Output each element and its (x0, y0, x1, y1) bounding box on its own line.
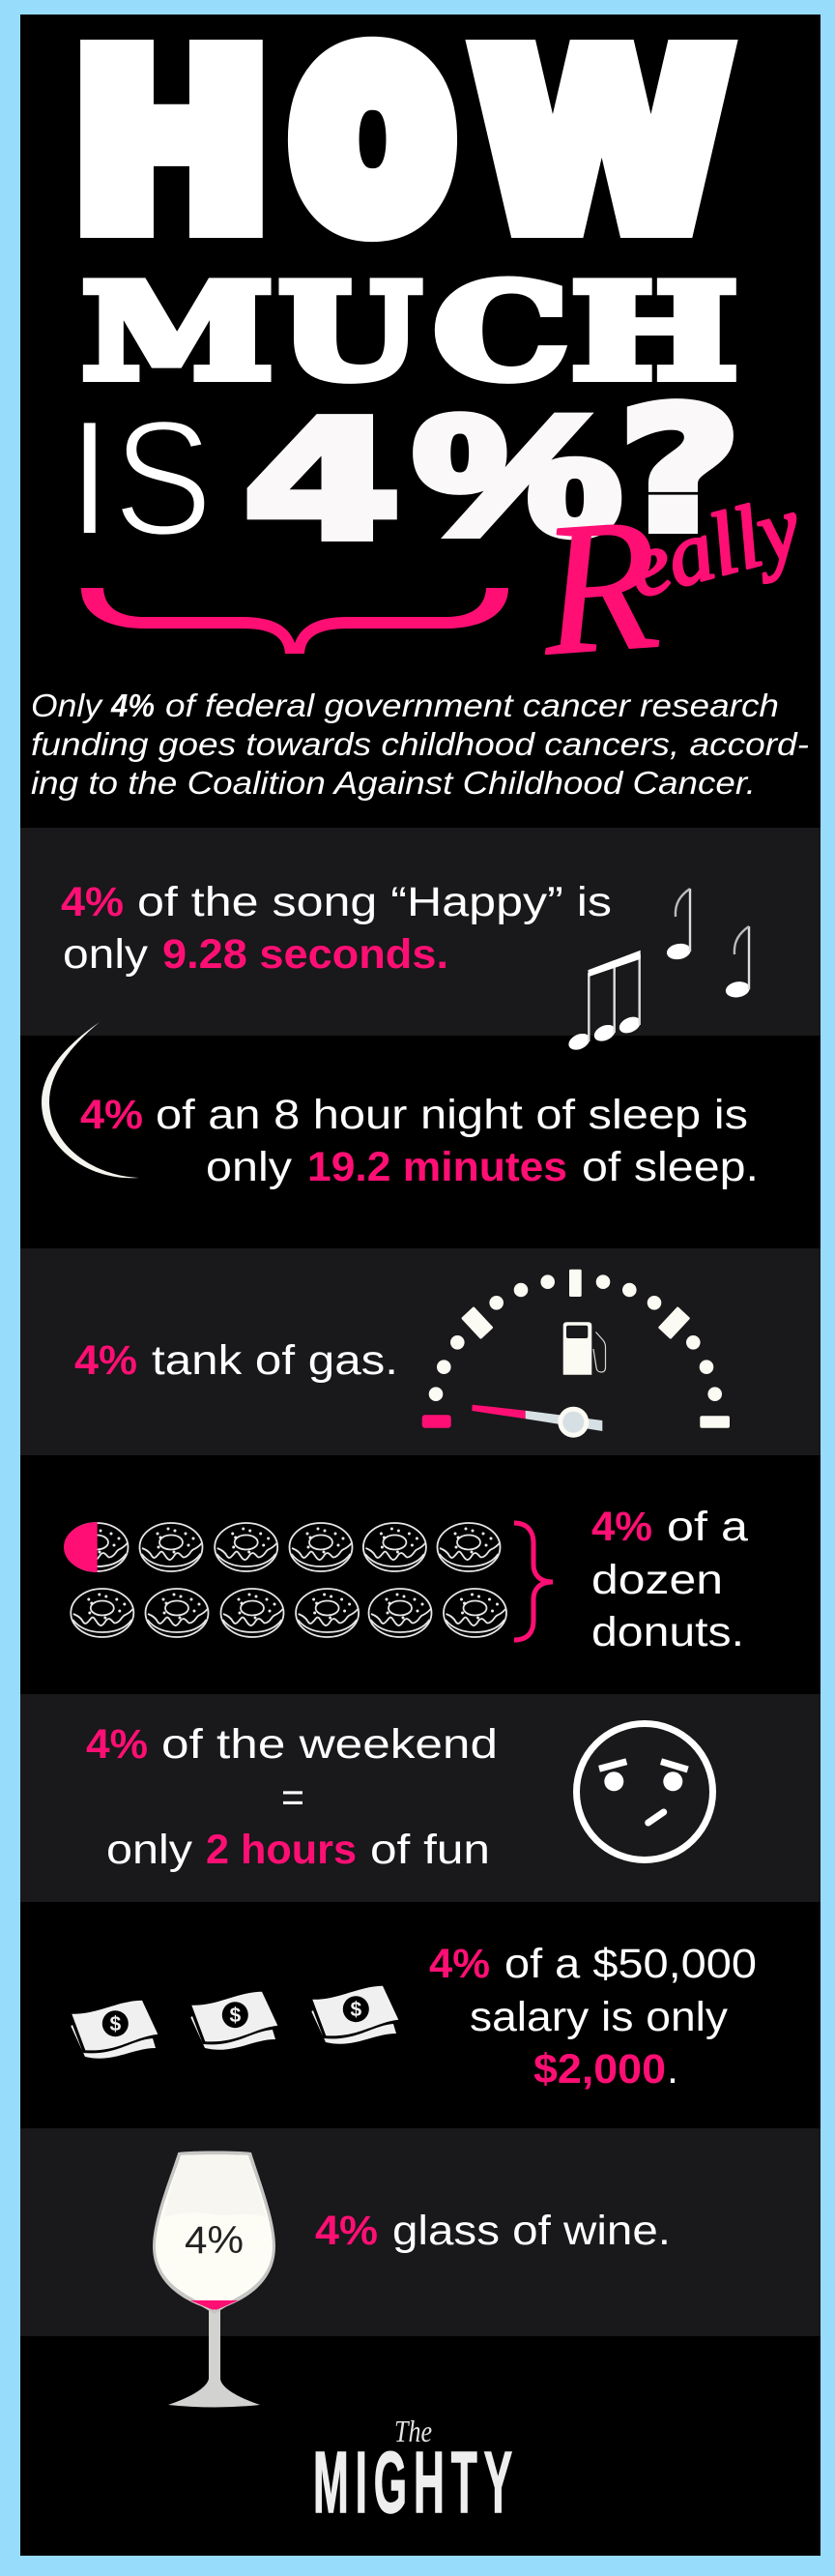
wine text: 4% (315, 2208, 378, 2254)
weekend text: 2 hours (206, 1827, 357, 1873)
donuts text: of a (667, 1504, 748, 1550)
sleep text: of an 8 hour night of sleep is (156, 1092, 748, 1138)
heading: 4%?: ? (619, 371, 741, 570)
note: single high (666, 889, 692, 961)
song text: only (63, 931, 149, 978)
donuts text (591, 1504, 748, 1655)
script word: Really (533, 476, 810, 695)
icon: worried face (576, 1723, 713, 1860)
script word: Really: eally (618, 476, 810, 616)
sleep text: 4% (80, 1092, 143, 1138)
fuel pump icon (563, 1322, 605, 1375)
gauge ticks (429, 1270, 730, 1428)
glass label: 4% (185, 2219, 244, 2262)
note: single right (725, 926, 751, 999)
song text: 4% (61, 879, 124, 925)
salary text: 4% (429, 1941, 490, 1987)
weekend text: only (106, 1827, 193, 1873)
song text (61, 879, 612, 978)
donuts row 1 (66, 1523, 501, 1571)
panel: salary (71, 1941, 757, 2093)
donuts text: donuts. (591, 1609, 744, 1655)
sleep text: of sleep. (582, 1144, 759, 1190)
song text: of the song “Happy” is (137, 879, 612, 925)
icon: crescent moon (42, 1022, 139, 1178)
empty marker (422, 1415, 451, 1428)
heading word: MUCH (82, 255, 737, 408)
heading word: IS: I (67, 386, 113, 571)
gas text: tank of gas. (152, 1337, 398, 1384)
wine text: glass of wine. (392, 2208, 671, 2254)
logo: The Mighty: The (394, 2414, 432, 2448)
intro text block: funding goes towards childhood cancers, accord- (31, 726, 809, 762)
heading: 4%? (242, 371, 741, 576)
intro text block: 4% (110, 688, 155, 723)
sleep text: only (206, 1144, 293, 1190)
heading word: MUCH: U (279, 256, 420, 408)
intro text block: Only (31, 688, 104, 723)
title (67, 8, 810, 695)
brace: donuts (514, 1523, 553, 1640)
heading word: HOW (73, 8, 727, 279)
panel: wine (20, 2128, 821, 2408)
salary text: of a $50,000 (504, 1941, 757, 1987)
brace under title (81, 588, 508, 654)
heading: 4%?: % (414, 381, 621, 570)
song text: 9.28 seconds. (162, 931, 448, 978)
panel: weekend (20, 1694, 821, 1902)
icons: money (71, 1986, 398, 2059)
salary text: . (667, 2046, 678, 2093)
eaten portion of donut (64, 1522, 98, 1572)
heading word: MUCH: M (82, 256, 273, 408)
intro text block (31, 688, 809, 801)
panel: sleep (42, 1022, 759, 1190)
panel: donuts (64, 1504, 748, 1655)
gauge (422, 1270, 730, 1438)
heading word: IS (67, 386, 213, 571)
donuts text: dozen (591, 1557, 723, 1603)
salary text (429, 1941, 757, 2093)
intro text block: ing to the Coalition Against Childhood Cancer. (31, 765, 756, 801)
gas text (74, 1337, 398, 1384)
heading word: HOW: W (476, 9, 727, 279)
sleep text: 19.2 minutes (307, 1144, 567, 1190)
panel: song (20, 828, 821, 1036)
heading word: HOW: O (298, 18, 447, 267)
needle (472, 1405, 602, 1438)
weekend text (86, 1721, 498, 1873)
icon: music notes (566, 889, 751, 1053)
script word: Really: R (533, 479, 665, 695)
heading word: HOW: H (73, 8, 270, 278)
heading word: IS: S (113, 387, 213, 571)
donuts text: 4% (591, 1504, 652, 1550)
logo: The Mighty (313, 2414, 519, 2532)
sleep text (80, 1092, 759, 1190)
weekend text: of the weekend (161, 1721, 498, 1768)
text: MIGHTY (313, 2435, 519, 2532)
intro text block: of federal government cancer research (165, 688, 779, 723)
heading word: MUCH: H (571, 255, 737, 408)
icon: wine glass (153, 2151, 275, 2408)
weekend text: = (281, 1774, 304, 1821)
salary text: salary is only (470, 1994, 729, 2040)
panel: gas (20, 1248, 821, 1455)
note: triple beamed (566, 951, 643, 1053)
heading: 4%?: 4 (242, 385, 402, 576)
weekend text: of fun (370, 1827, 490, 1873)
salary text: $2,000 (533, 2046, 666, 2093)
heading word: MUCH: C (434, 255, 568, 408)
weekend text: 4% (86, 1721, 148, 1768)
donuts row 2 (71, 1589, 506, 1637)
gas text: 4% (74, 1337, 137, 1384)
